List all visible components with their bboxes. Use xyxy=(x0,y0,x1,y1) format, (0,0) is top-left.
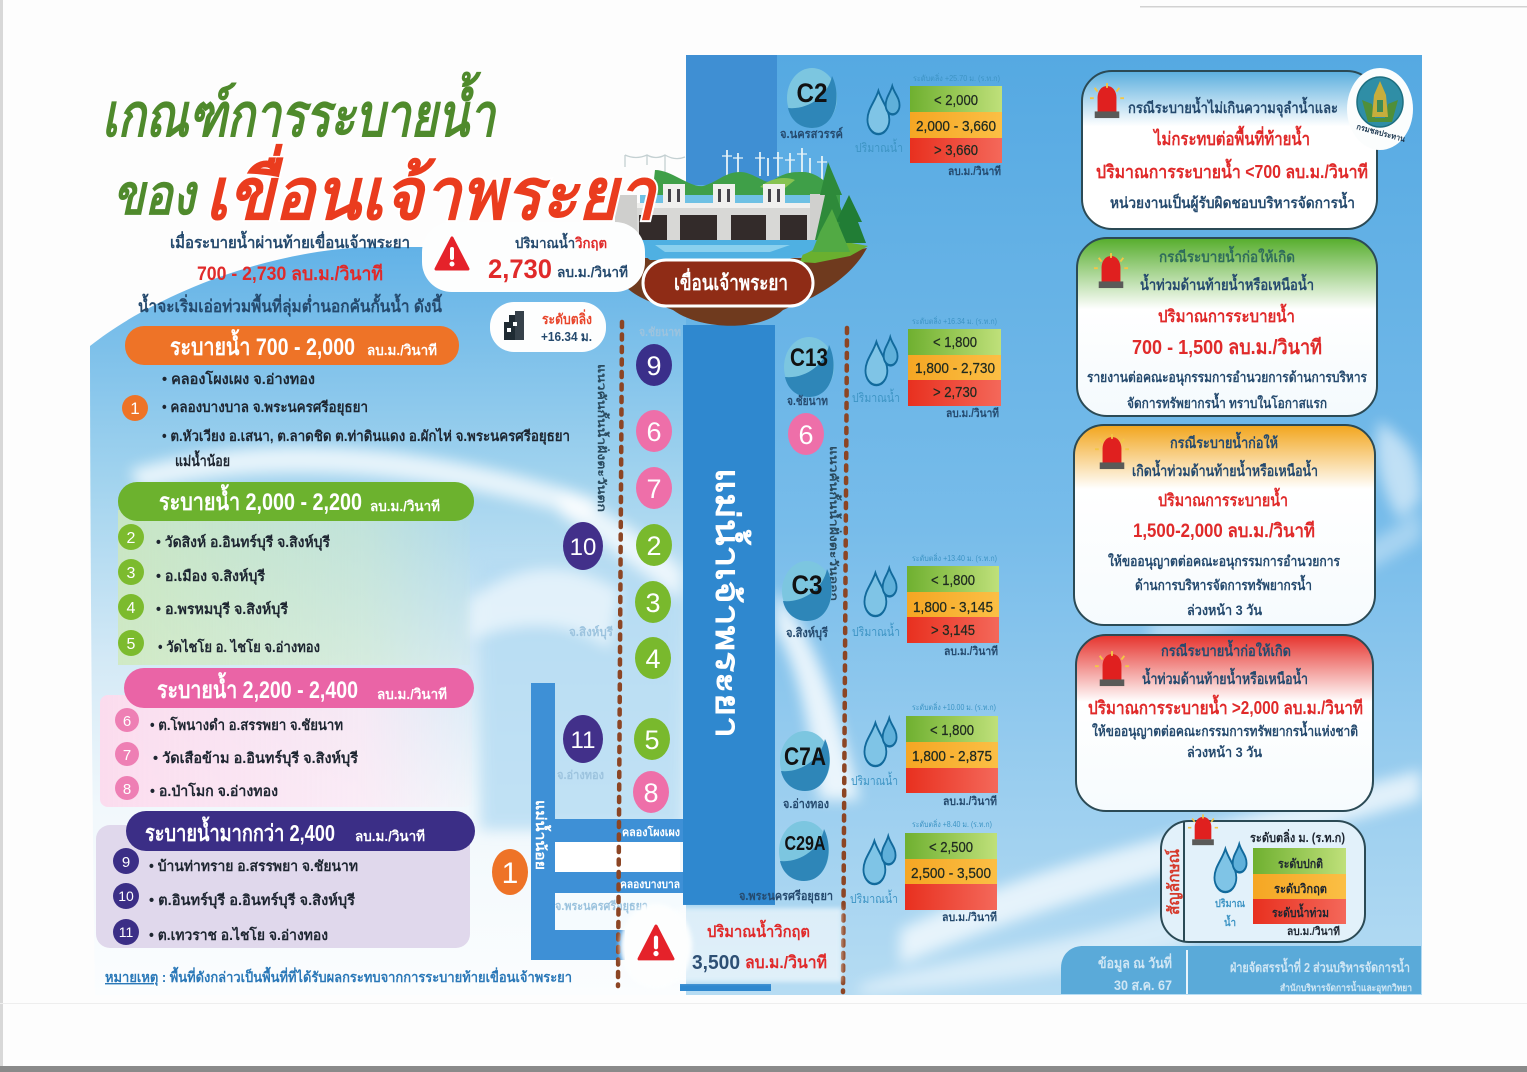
bank level callout: ระดับตลิ่ง xyxy=(542,309,592,327)
flow label xyxy=(851,718,898,788)
critical flow callout 3,500: 3,500 xyxy=(692,952,740,974)
pink band list: • ต.โพนางดำ อ.สรรพยา จ.ชัยนาท xyxy=(150,716,343,734)
card: flood 1,500-2,000: ล่วงหน้า 3 วัน xyxy=(1187,602,1262,618)
threshold table: 1,800 - 2,730 xyxy=(915,361,995,377)
band heading: ลบ.ม./วินาที xyxy=(370,498,440,514)
badges 2-5: 4 xyxy=(127,600,136,617)
green band list: • วัดไชโย อ. ไชโย จ.อ่างทอง xyxy=(158,638,320,656)
title line 3: dam name: เขื่อนเจ้าพระยา xyxy=(205,143,658,235)
critical flow callout 3,500: ลบ.ม./วินาที xyxy=(745,952,827,972)
station C13 xyxy=(784,315,1001,420)
card: flood 1,500-2,000 xyxy=(1074,425,1375,625)
dam towers xyxy=(663,184,785,205)
purple band list: • ต.อินทร์บุรี อ.อินทร์บุรี จ.สิงห์บุรี xyxy=(149,891,355,909)
card: flood over 2,000 xyxy=(1076,635,1373,811)
map point badges west of river: 1 xyxy=(502,857,518,890)
card: within channel capacity: ไม่กระทบต่อพื้นที่ท้ายน้ำ xyxy=(1152,125,1310,149)
legend colour rows: ระดับปกติ xyxy=(1278,857,1323,871)
badges 9-11: 11 xyxy=(119,924,133,940)
orange band list xyxy=(162,370,570,470)
band heading: ระบายน้ำมากกว่า 2,400 xyxy=(145,816,335,846)
canal label: Pho Phaeng: คลองโผงเผง xyxy=(622,825,680,839)
orange band list: • ต.หัวเวียง อ.เสนา, ต.ลาดชิด ต.ท่าดินแดง อ.ผักไห่ จ.พระนครศรีอยุธยา xyxy=(162,427,570,445)
station marker xyxy=(787,68,837,128)
station marker: C13 xyxy=(790,344,828,372)
threshold table: 2,500 - 3,500 xyxy=(911,866,991,882)
flow label: ปริมาณน้ำ xyxy=(851,771,898,788)
badges 6-8 xyxy=(115,708,139,800)
station C7A xyxy=(780,701,998,811)
card: flood 700-1,500: จัดการทรัพยากรน้ำ ทราบในโอกาสแรก xyxy=(1127,392,1327,411)
band heading: ระบายน้ำ 2,000 - 2,200 xyxy=(159,483,362,516)
purple band list: • บ้านท่าทราย อ.สรรพยา จ.ชัยนาท xyxy=(149,858,358,875)
card: flood 700-1,500: กรณีระบายน้ำก่อให้เกิด xyxy=(1159,245,1295,266)
flow label: ปริมาณน้ำ xyxy=(852,388,900,405)
map point badges west of river: 2 xyxy=(646,531,662,561)
footer bar: 30 ส.ค. 67 xyxy=(1114,977,1172,993)
flow label: ปริมาณน้ำ xyxy=(850,889,898,906)
footer bar: ข้อมูล ณ วันที่ xyxy=(1098,953,1172,972)
threshold table: ลบ.ม./วินาที xyxy=(942,911,997,924)
map point badges west of river: 6 xyxy=(646,417,662,447)
river: bottom segment xyxy=(680,984,771,991)
green band list: • อ.พรหมบุรี จ.สิงห์บุรี xyxy=(156,600,288,618)
station marker xyxy=(779,821,829,881)
hills xyxy=(650,170,840,215)
logo: Royal Irrigation Department: กรมชลประทาน xyxy=(1355,122,1407,144)
station C7A: จ.อ่างทอง xyxy=(783,797,829,811)
threshold table: ลบ.ม./วินาที xyxy=(948,165,1001,178)
threshold table: 1,800 - 2,875 xyxy=(912,749,992,765)
footnote: หมายเหตุ : พื้นที่ดังกล่าวเป็นพื้นที่ที่ได้รับผลกระทบจากการระบายท้ายเขื่อนเจ้าพระยา xyxy=(105,966,572,986)
dam name pill xyxy=(643,260,813,306)
card: flood over 2,000: กรณีระบายน้ำก่อให้เกิด xyxy=(1161,639,1291,660)
card: within channel capacity xyxy=(1082,71,1377,229)
icon: siren xyxy=(1090,83,1124,118)
orange band list: แม่น้ำน้อย xyxy=(175,450,230,470)
river name: แม่น้ำเจ้าพระยา xyxy=(709,468,752,738)
footer bar xyxy=(1061,946,1421,994)
threshold table: ระดับตลิ่ง +25.70 ม. (ร.ท.ก) xyxy=(913,72,1000,83)
icon: building xyxy=(504,311,524,340)
flow label: ปริมาณน้ำ xyxy=(855,138,903,155)
earth xyxy=(627,248,867,326)
icon: siren xyxy=(1095,651,1129,686)
badges 6-8: 6 xyxy=(123,713,131,730)
threshold table: ลบ.ม./วินาที xyxy=(946,407,999,420)
station marker: C7A xyxy=(784,743,826,771)
band heading: ระบายน้ำ 700 - 2,000 xyxy=(170,328,355,361)
band heading xyxy=(125,326,459,365)
panel: orange band 700-2,000 xyxy=(122,326,570,470)
orange band list: • คลองโผงเผง จ.อ่างทอง xyxy=(162,370,315,388)
card: flood 1,500-2,000: ปริมาณการระบายน้ำ xyxy=(1158,487,1288,510)
wind turbines xyxy=(722,148,827,186)
title line 1: เกณฑ์การระบายน้ำ xyxy=(102,71,497,149)
panel: pink band 2,200-2,400 xyxy=(100,668,474,807)
intro text: 700 - 2,730 ลบ.ม./วินาที xyxy=(197,263,383,285)
threshold table: < 2,500 xyxy=(929,840,973,856)
faint province labels: จ.ชัยนาท xyxy=(639,325,681,339)
legend: ปริมาณ xyxy=(1215,898,1245,910)
map point badges west of river: 4 xyxy=(645,644,661,674)
threshold table: < 1,800 xyxy=(930,723,974,739)
map point badges west of river: 10 xyxy=(570,534,596,561)
flow label xyxy=(850,836,898,906)
river: upper segment xyxy=(686,55,777,185)
card: flood over 2,000: ให้ขออนุญาตต่อคณะกรรมการทรัพยากรน้ำแห่งชาติ xyxy=(1092,720,1358,740)
legend colour rows: ระดับน้ำท่วม xyxy=(1272,903,1329,920)
bank level callout xyxy=(490,302,606,352)
threshold table: < 2,000 xyxy=(934,93,978,109)
card: within channel capacity: หน่วยงานเป็นผู้รับผิดชอบบริหารจัดการน้ำ xyxy=(1110,191,1355,213)
river: main channel xyxy=(683,325,775,905)
dam name pill: เขื่อนเจ้าพระยา xyxy=(674,267,788,295)
canal label: Noi river: แม่น้ำน้อย xyxy=(533,800,552,870)
power line xyxy=(625,155,685,185)
purple band list: • ต.เทวราช อ.ไชโย จ.อ่างทอง xyxy=(149,926,328,944)
threshold table: < 1,800 xyxy=(933,335,977,351)
threshold table: ลบ.ม./วินาที xyxy=(944,645,998,658)
badges 2-5: 2 xyxy=(127,530,136,547)
map point badges west of river xyxy=(492,344,824,895)
station C29A: จ.พระนครศรีอยุธยา xyxy=(739,889,833,904)
panel: purple band over 2,400 xyxy=(96,811,475,948)
station C2 xyxy=(780,68,1002,178)
pink band list: • วัดเสือข้าม อ.อินทร์บุรี จ.สิงห์บุรี xyxy=(153,749,358,767)
band heading: ลบ.ม./วินาที xyxy=(377,686,447,702)
band heading xyxy=(126,811,475,851)
threshold table xyxy=(905,818,997,924)
intro text: เมื่อระบายน้ำผ่านท้ายเขื่อนเจ้าพระยา xyxy=(170,230,410,252)
pink band list xyxy=(150,716,358,800)
east embankment label: แนวคันกั้นน้ำฝั่งตะวันออก xyxy=(827,446,842,601)
faint province labels: จ.สิงห์บุรี xyxy=(569,625,614,640)
card: flood 700-1,500: ปริมาณการระบายน้ำ xyxy=(1158,303,1295,326)
logo: Royal Irrigation Department xyxy=(1347,68,1413,150)
map point badges west of river: 3 xyxy=(645,588,661,618)
card: flood 700-1,500: 700 - 1,500 ลบ.ม./วินาที xyxy=(1132,336,1322,359)
station marker: C3 xyxy=(792,570,822,600)
flow label xyxy=(852,568,900,639)
trees xyxy=(815,162,852,240)
green band list: • วัดสิงห์ อ.อินทร์บุรี จ.สิงห์บุรี xyxy=(156,533,330,551)
card: flood 700-1,500: รายงานต่อคณะอนุกรรมการอำนวยการด้านการบริหาร xyxy=(1087,369,1367,386)
card: flood 1,500-2,000: ให้ขออนุญาตต่อคณะอนุกรรมการอำนวยการ xyxy=(1108,552,1340,570)
panel: green band 2,000-2,200 xyxy=(118,482,474,665)
station C29A xyxy=(739,818,997,924)
footer bar: สำนักบริหารจัดการน้ำและอุทกวิทยา xyxy=(1280,980,1412,994)
flow label xyxy=(855,86,903,155)
card: flood 1,500-2,000: เกิดน้ำท่วมด้านท้ายน้ำหรือเหนือน้ำ xyxy=(1132,459,1318,480)
panel: orange band 700-2,000: 1 xyxy=(130,399,140,418)
grass and water xyxy=(800,240,868,263)
badges 9-11: 9 xyxy=(122,854,130,871)
pink band list: • อ.ป่าโมก จ.อ่างทอง xyxy=(150,782,278,800)
footer bar: ฝ่ายจัดสรรน้ำที่ 2 ส่วนบริหารจัดการน้ำ xyxy=(1230,957,1410,975)
faint province labels xyxy=(557,325,681,782)
legend drop xyxy=(1214,844,1247,892)
legend colour rows xyxy=(1253,848,1346,924)
critical flow callout 3,500: ปริมาณน้ำวิกฤต xyxy=(707,919,810,941)
badge 1 xyxy=(122,395,148,421)
map point badges west of river: 9 xyxy=(646,351,662,381)
station C13: จ.ชัยนาท xyxy=(787,394,828,408)
badges 9-11 xyxy=(113,848,139,945)
bank level callout: +16.34 ม. xyxy=(541,329,592,344)
critical flow callout 2,730: ปริมาณน้ำวิกฤต xyxy=(515,232,607,251)
card: flood over 2,000: น้ำท่วมด้านท้ายน้ำหรือเหนือน้ำ xyxy=(1142,667,1308,688)
title line 2: ของ xyxy=(113,163,199,226)
critical flow callout 3,500 xyxy=(620,904,842,988)
card: flood 700-1,500: น้ำท่วมด้านท้ายน้ำหรือเหนือน้ำ xyxy=(1140,273,1314,294)
threshold table: ระดับตลิ่ง +8.40 ม. (ร.ท.ก) xyxy=(912,818,992,829)
station marker: C29A xyxy=(784,833,826,855)
legend: น้ำ xyxy=(1224,914,1236,929)
card: flood over 2,000: ล่วงหน้า 3 วัน xyxy=(1187,744,1262,760)
station C3 xyxy=(782,552,999,658)
title xyxy=(102,71,497,226)
dam body xyxy=(640,195,815,205)
green band list xyxy=(156,533,330,656)
badges 2-5: 3 xyxy=(127,565,136,582)
central pale blue wash xyxy=(480,560,685,830)
band heading: ลบ.ม./วินาที xyxy=(367,342,437,358)
station marker xyxy=(782,561,832,621)
card: flood 1,500-2,000: 1,500-2,000 ลบ.ม./วินาที xyxy=(1133,520,1315,542)
icon: siren xyxy=(1095,434,1129,469)
threshold table: 2,000 - 3,660 xyxy=(916,119,996,135)
orange band list: • คลองบางบาล จ.พระนครศรีอยุธยา xyxy=(162,399,368,416)
station marker: C2 xyxy=(796,78,828,108)
green band list: • อ.เมือง จ.สิงห์บุรี xyxy=(156,567,265,585)
legend xyxy=(1161,814,1365,942)
band heading: ระบายน้ำ 2,200 - 2,400 xyxy=(157,671,358,704)
badges 2-5: 5 xyxy=(127,636,136,653)
flow label xyxy=(852,337,900,405)
west embankment label: แนวคันกั้นน้ำฝั่งตะวันตก xyxy=(595,364,610,512)
threshold table: > 3,660 xyxy=(934,143,978,159)
right panel background xyxy=(686,55,1422,995)
legend: ระดับตลิ่ง ม. (ร.ท.ก) xyxy=(1250,829,1345,845)
purple band list xyxy=(149,858,358,944)
map point badges west of river: 7 xyxy=(646,474,662,504)
band heading: ลบ.ม./วินาที xyxy=(355,828,425,844)
card: within channel capacity: กรณีระบายน้ำไม่เกินความจุลำน้ำและ xyxy=(1128,96,1338,118)
critical flow callout 2,730: 2,730 xyxy=(488,254,552,284)
card: flood 1,500-2,000: ด้านการบริหารจัดการทรัพยากรน้ำ xyxy=(1135,574,1312,593)
critical flow callout 2,730 xyxy=(422,222,645,292)
threshold table xyxy=(908,315,1001,420)
band heading xyxy=(124,668,474,708)
left panel background xyxy=(90,247,700,995)
card: within channel capacity: ปริมาณการระบายน้ำ <700 ลบ.ม./วินาที xyxy=(1096,158,1368,182)
threshold table: ลบ.ม./วินาที xyxy=(943,795,997,808)
canal network xyxy=(531,683,683,960)
station marker xyxy=(784,337,834,397)
intro text: น้ำจะเริ่มเอ่อท่วมพื้นที่ลุ่มต่ำนอกคันกั้นน้ำ ดังนี้ xyxy=(138,293,442,317)
card: flood over 2,000: ปริมาณการระบายน้ำ >2,000 ลบ.ม./วินาที xyxy=(1088,694,1363,718)
threshold table: ระดับตลิ่ง +10.00 ม. (ร.ท.ก) xyxy=(912,701,996,712)
band heading xyxy=(118,482,474,521)
card: flood 700-1,500 xyxy=(1077,238,1377,416)
icon: siren xyxy=(1094,253,1128,288)
legend title: สัญลักษณ์ xyxy=(1164,849,1184,915)
threshold table: > 2,730 xyxy=(933,385,977,401)
threshold table xyxy=(910,72,1002,178)
map point badges west of river: 5 xyxy=(644,725,660,755)
station C2: จ.นครสวรรค์ xyxy=(780,126,843,141)
threshold table: ระดับตลิ่ง +16.34 ม. (ร.ท.ก) xyxy=(912,315,997,326)
map point badges west of river: 6 xyxy=(798,420,814,450)
threshold table xyxy=(907,552,999,658)
canal label: Bang Ban: คลองบางบาล xyxy=(620,879,680,891)
east embankment dotted line xyxy=(843,328,847,992)
legend colour rows: ระดับวิกฤต xyxy=(1274,882,1327,896)
province label: Ayutthaya faint: จ.พระนครศรีอยุธยา xyxy=(555,899,648,914)
badges 2-5 xyxy=(118,524,144,656)
badges 6-8: 8 xyxy=(123,781,131,798)
icon: siren xyxy=(1188,814,1218,845)
station C3: จ.สิงห์บุรี xyxy=(786,625,828,641)
west embankment dotted line xyxy=(618,322,622,986)
threshold table: > 3,145 xyxy=(931,623,975,639)
critical flow callout 2,730: ลบ.ม./วินาที xyxy=(557,264,628,280)
legend: ลบ.ม./วินาที xyxy=(1287,925,1340,938)
map point badges west of river: 8 xyxy=(643,778,659,808)
badges 9-11: 10 xyxy=(118,888,134,904)
dam illustration xyxy=(615,148,868,326)
threshold table: 1,800 - 3,145 xyxy=(913,600,993,616)
station marker xyxy=(780,731,830,791)
threshold table xyxy=(906,701,998,808)
threshold table: < 1,800 xyxy=(931,573,975,589)
dam gates xyxy=(639,215,807,240)
card: flood 1,500-2,000: กรณีระบายน้ำก่อให้ xyxy=(1170,431,1278,452)
badges 6-8: 7 xyxy=(123,747,131,764)
sky swooshes xyxy=(130,420,1421,995)
faint province labels: จ.อ่างทอง xyxy=(557,768,604,782)
threshold table: ระดับตลิ่ง +13.40 ม. (ร.ท.ก) xyxy=(912,552,997,563)
flow label: ปริมาณน้ำ xyxy=(852,622,900,639)
map point badges west of river: 11 xyxy=(571,727,595,754)
intro text xyxy=(138,230,442,317)
